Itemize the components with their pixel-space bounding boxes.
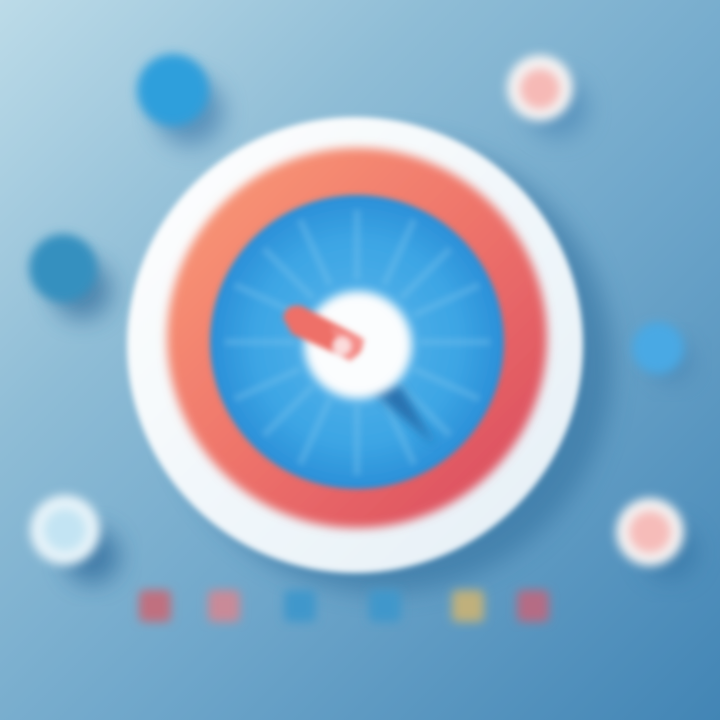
- legend squares: [139, 590, 549, 622]
- outer white ring: [127, 117, 583, 573]
- dot: pink top right: [507, 55, 588, 138]
- red pointer: [283, 306, 365, 362]
- dial shadow: [157, 137, 613, 593]
- dot: teal left: [29, 234, 112, 320]
- dot: pale blue bottom left: [30, 495, 120, 584]
- blue disc: [210, 195, 504, 489]
- dot: blue top left: [137, 54, 224, 146]
- dot: pink bottom right: [616, 498, 698, 580]
- dial: [127, 117, 613, 593]
- center hub shadow: [365, 385, 435, 445]
- orange-red ring: [167, 148, 547, 528]
- dot: blue right: [632, 322, 694, 384]
- center white hub: [304, 291, 412, 399]
